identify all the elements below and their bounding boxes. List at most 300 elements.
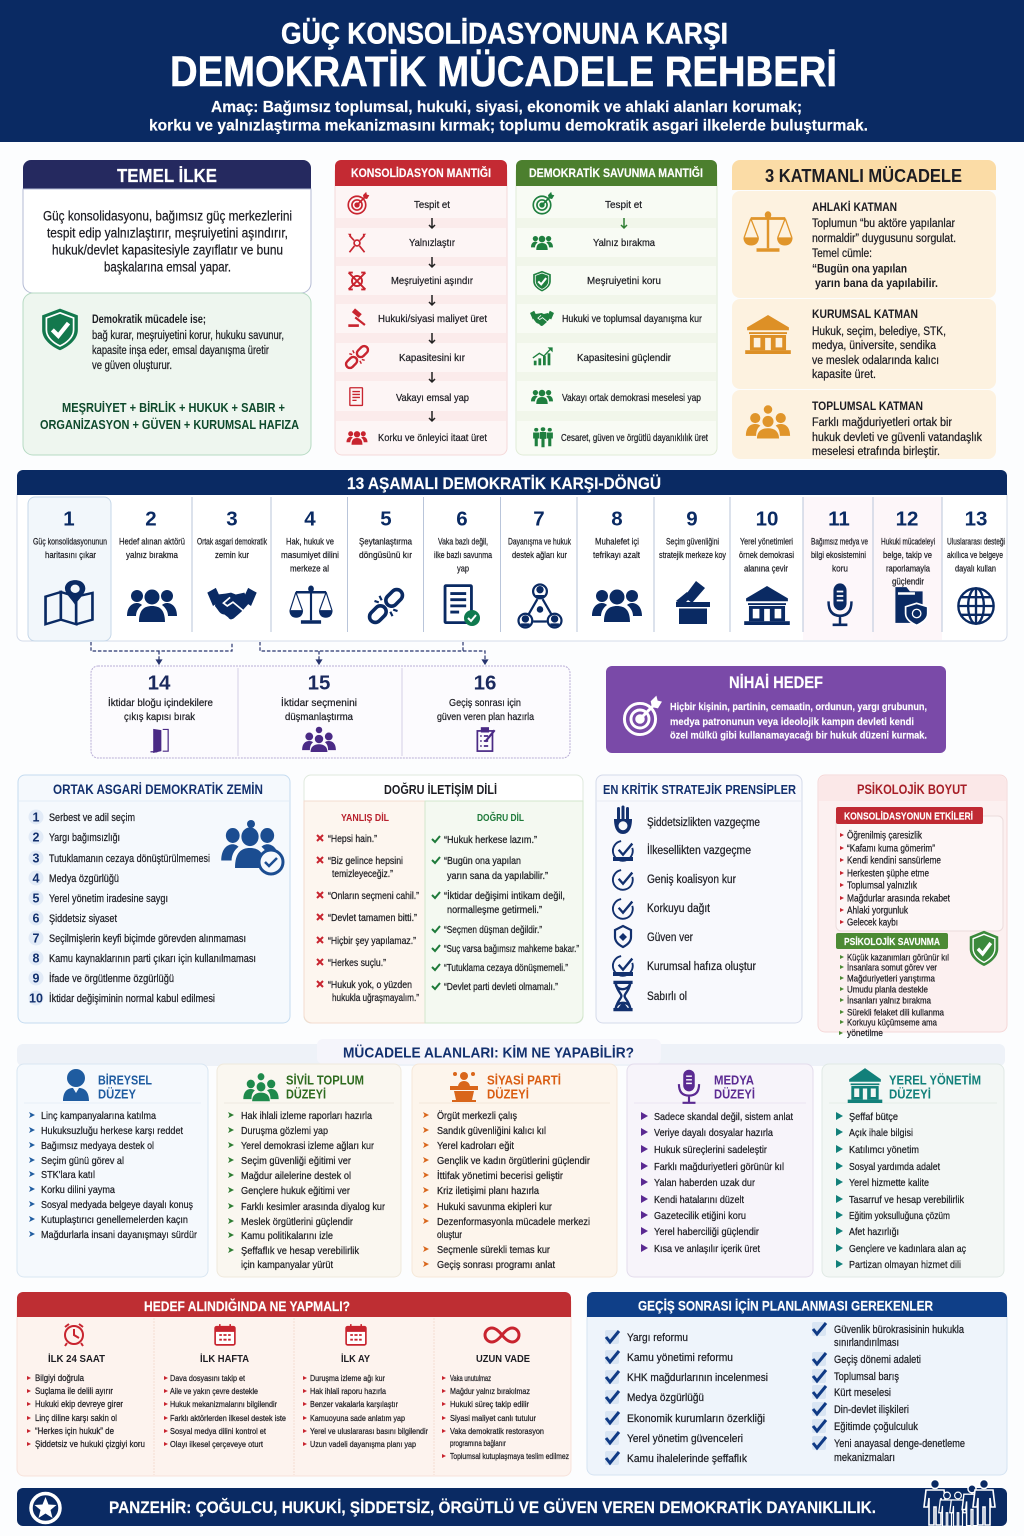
step descriptions: Güç konsolidasyonunun (33, 536, 107, 548)
bireysel heading: DÜZEY (98, 1086, 137, 1102)
panel: demokratik savunma mantığı (516, 160, 717, 455)
right language column: DOĞRU DİL (477, 811, 524, 824)
column: uzun vade: Vaka demokratik restorasyon (450, 1426, 544, 1436)
panel: siyasi parti düzeyi (412, 1064, 617, 1277)
kurumsal katman (732, 299, 996, 389)
medya list (654, 1111, 793, 1255)
step descriptions: Hedef alınan aktörü (119, 536, 185, 548)
right language column: “Suç varsa bağımsız mahkeme bakar.” (444, 944, 579, 955)
medya list: Kısa ve anlaşılır içerik üret (654, 1243, 760, 1255)
yerel list: Yerel hizmette kalite (849, 1177, 929, 1189)
konsolidasyon arrows (429, 218, 435, 421)
stage 15: 15 (308, 672, 330, 694)
step descriptions: örnek demokrasi (739, 550, 794, 561)
savunma steps: Kapasitesini güçlendir (577, 352, 671, 364)
mücadele text: bağ kurar, meşruiyetini korur, hukuku savunur, (92, 330, 284, 342)
panel: demokratik mücadele (23, 293, 311, 455)
medya list: Gazetecilik etiğini koru (654, 1210, 746, 1222)
step descriptions: Hak, hukuk ve (286, 536, 334, 548)
konsolidasyon steps: Yalnızlaştır (409, 237, 455, 249)
panel: ortak asgari demokratik zemin: 10 (29, 992, 43, 1006)
step numbers: 12 (896, 508, 918, 530)
savunma icons (530, 194, 554, 447)
column: ilk ay: Duruşma izleme ağı kur (310, 1373, 385, 1383)
right language column: normalleşme getirmeli.” (447, 905, 542, 916)
column: uzun vade: Toplumsal kutuplaşmaya teslim edilmez (450, 1451, 569, 1461)
wrong language column: temizleyeceğiz.” (332, 869, 393, 880)
panzehir text: PANZEHİR: ÇOĞULCU, HUKUKİ, ŞİDDETSİZ, ÖRGÜTLÜ VE GÜVEN VEREN DEMOKRATİK DAYANIKLILIK. (109, 1498, 876, 1517)
savunma steps: Cesaret, güven ve örgütlü dayanıklılık üret (561, 432, 708, 444)
medya list: Sadece skandal değil, sistem anlat (654, 1111, 793, 1123)
panel: ortak asgari demokratik zemin: 6 (33, 912, 40, 926)
mücadele heading: MÜCADELE ALANLARI: KİM NE YAPABİLİR? (343, 1044, 634, 1062)
right language column: “Devlet parti devleti olmamalı.” (444, 982, 558, 993)
geçiş list: Geçiş dönemi adaleti (834, 1354, 921, 1366)
column: ilk 24 saat: Suçlama ile delili ayırır (35, 1386, 113, 1396)
ahlaki katman: normaldir” duygusunu sorgulat. (812, 233, 956, 245)
zemin list: Tutuklamanın cezaya dönüştürülmemesi (49, 853, 210, 865)
column: ilk ay: Kamuoyuna sade anlatım yap (310, 1413, 405, 1423)
bireysel heading (98, 1072, 152, 1102)
sivil list: Yerel demokrasi izleme ağları kur (241, 1140, 374, 1152)
sivil list: Mağdur ailelerine destek ol (241, 1170, 351, 1182)
step descriptions: bilgi ekosistemini (811, 550, 866, 561)
wrong language column: hukukla uğraşmayalım.” (332, 993, 419, 1004)
step numbers (63, 508, 987, 530)
savunma steps: Hukuki ve toplumsal dayanışma kur (562, 313, 702, 325)
medya heading: DÜZEYİ (714, 1086, 755, 1102)
stage 14: çıkış kapısı bırak (124, 711, 196, 723)
step descriptions: Vaka bazlı değil, (438, 536, 488, 548)
konsolidasyonun etkileri: Mağdurlar arasında rekabet (847, 894, 950, 904)
medya heading: MEDYA (714, 1074, 754, 1088)
konsolidasyonun etkileri: Toplumsal yalnızlık (847, 880, 918, 892)
konsolidasyon steps: Kapasitesini kır (399, 352, 465, 364)
mücadele text: ve güven oluşturur. (92, 360, 172, 372)
kurumsal katman: kapasite üret. (812, 369, 876, 381)
panel: yerel yönetim düzeyi (822, 1064, 1004, 1277)
panel: ortak asgari demokratik zemin: 5 (33, 892, 40, 906)
column: ilk hafta: Dava dosyasını takip et (170, 1373, 246, 1383)
bireysel heading: BİREYSEL (98, 1072, 152, 1088)
panel: 13 aşamalı karşı-döngü (17, 470, 1007, 641)
nihai hedef text: özel mülkü gibi kullanamayacağı bir hukuk düzeni kurmak. (670, 730, 927, 742)
zemin list: Serbest ve adil seçim (49, 812, 135, 824)
prensipler heading: EN KRİTİK STRATEJİK PRENSİPLER (603, 782, 797, 797)
savunma steps: Vakayı ortak demokrasi meselesi yap (562, 392, 701, 404)
icon: green group (243, 1073, 279, 1101)
step descriptions: Muhalefet içi (595, 536, 639, 548)
nihai hedef text: medya patronunun veya ideolojik kampın devleti kendi (670, 716, 914, 728)
temel ilke text (43, 208, 292, 274)
toplumsal katman: TOPLUMSAL KATMAN (812, 401, 923, 413)
step icons (46, 580, 994, 628)
stage 16: Geçiş sonrası için (449, 697, 521, 709)
sivil heading: SİVİL TOPLUM (286, 1072, 364, 1088)
geçiş list: Kürt meselesi (834, 1387, 891, 1399)
prensipler list: Güven ver (647, 932, 693, 944)
siyasi list: Gençlik ve kadın örgütlerini güçlendir (437, 1155, 590, 1167)
geçiş list: Yargı reformu (627, 1332, 688, 1344)
konsolidasyonun etkileri: Öğrenilmiş çaresizlik (847, 830, 923, 842)
step descriptions: alanına çevir (744, 564, 788, 574)
column: ilk hafta: İLK HAFTA (200, 1352, 249, 1365)
dashed connectors (91, 642, 488, 664)
step numbers: 11 (828, 508, 850, 530)
column: ilk ay: Benzer vakalarla karşılaştır (310, 1399, 398, 1409)
stage 16: güven veren plan hazırla (437, 711, 534, 723)
yerel list: Sosyal yardımda adalet (849, 1161, 940, 1173)
step descriptions: Bağımsız medya ve (811, 536, 868, 548)
formula: MEŞRUİYET + BİRLİK + HUKUK + SABIR + (62, 400, 285, 415)
prensipler list: Sabırlı ol (647, 991, 687, 1003)
ahlaki katman: Toplumun “bu aktöre yapılanlar (812, 218, 955, 230)
kurumsal katman: KURUMSAL KATMAN (812, 309, 918, 321)
panel: medya düzeyi (627, 1064, 813, 1277)
psikolojik savunma: Sürekli felaket dili kullanma (847, 1008, 945, 1018)
siyasi list: Geçiş sonrası programı anlat (437, 1259, 555, 1271)
right language column (425, 801, 583, 1023)
temel ilke text: başkalarına emsal yapar. (104, 260, 231, 274)
geçiş list: Kamu yönetimi reformu (627, 1352, 733, 1364)
geçiş list: Kamu ihalelerinde şeffaflık (627, 1453, 747, 1465)
stage 14: 14 (148, 672, 171, 694)
mücadele text (92, 314, 284, 372)
siyasi list: Hukuki savunma ekipleri kur (437, 1201, 552, 1213)
panel: ortak asgari demokratik zemin: 2 (33, 830, 40, 844)
zemin list: Yargı bağımsızlığı (49, 832, 120, 844)
panel: ortak asgari demokratik zemin: 9 (33, 972, 40, 986)
column: ilk 24 saat: Linç diline karşı sakin ol (35, 1413, 117, 1423)
geçiş list: Ekonomik kurumların özerkliği (627, 1413, 765, 1425)
yerel heading: DÜZEYİ (889, 1086, 931, 1102)
icon: crowd silhouettes (924, 1480, 995, 1526)
temel ilke text: tespit edip yalnızlaştırır, meşruiyetini aşındırır, (47, 226, 288, 240)
step descriptions: masumiyet dilini (281, 550, 339, 561)
sivil heading: DÜZEYİ (286, 1086, 326, 1102)
medya list: Hukuk süreçlerini sadeleştir (654, 1144, 767, 1156)
geçiş list: Yerel yönetim güvenceleri (627, 1433, 743, 1445)
bireysel list: Linç kampanyalarına katılma (41, 1110, 156, 1122)
psikolojik savunma: yönetilme (847, 1028, 883, 1039)
savunma steps: Meşruiyetini koru (587, 275, 661, 287)
step numbers: 3 (226, 508, 238, 530)
mücadele text: kapasite inşa eder, emsal dayanışma üretir (92, 345, 269, 357)
panel: ortak asgari demokratik zemin: 3 (33, 852, 40, 866)
column: ilk hafta: Hukuk mekanizmalarını bilgilendir (170, 1399, 277, 1409)
geçiş list: Medya özgürlüğü (627, 1392, 704, 1404)
step descriptions: Şeytanlaştırma (359, 536, 413, 548)
column: ilk hafta: Sosyal medya dilini kontrol et (170, 1426, 267, 1436)
iletişim heading: DOĞRU İLETİŞİM DİLİ (384, 782, 497, 797)
geçiş list: mekanizmaları (834, 1452, 895, 1464)
konsolidasyon steps (378, 199, 487, 444)
panel: 3 katmanlı mücadele (732, 160, 996, 459)
subtitle: Amaç: Bağımsız toplumsal, hukuki, siyasi, ekonomik ve ahlaki alanları korumak; (211, 99, 802, 116)
medya heading (714, 1074, 755, 1102)
step descriptions: Yerel yönetimleri (740, 536, 793, 548)
panel: temel ilke (23, 160, 311, 293)
bireysel list: Hukuksuzluğu herkese karşı reddet (41, 1125, 183, 1137)
column: ilk ay: Uzun vadeli dayanışma planı yap (310, 1439, 416, 1449)
prensipler list: Geniş koalisyon kur (647, 874, 736, 886)
step numbers: 6 (456, 508, 468, 530)
geçiş list: Toplumsal barış (834, 1371, 899, 1383)
band: mücadele alanları (17, 1039, 1005, 1066)
step descriptions: tefrikayı azalt (593, 550, 640, 561)
konsolidasyonun etkileri: Ahlaki yorgunluk (847, 906, 909, 916)
geçiş list: Eğitimde çoğulculuk (834, 1421, 918, 1433)
psikolojik savunma: Umudu planla destekle (847, 984, 928, 996)
column: ilk ay (303, 1324, 428, 1449)
geçiş heading: GEÇİŞ SONRASI İÇİN PLANLANMASI GEREKENLER (638, 1298, 933, 1314)
column: uzun vade: Vaka unutulmaz (450, 1373, 491, 1383)
column: ilk hafta: Olayı ilkesel çerçeveye oturt (170, 1439, 264, 1449)
sivil list: Farklı kesimler arasında diyalog kur (241, 1201, 385, 1213)
wrong language column: “Devlet tamamen bitti.” (328, 913, 417, 924)
bireysel list (41, 1110, 197, 1241)
step descriptions: zemin kur (215, 550, 249, 561)
geçiş list: Din-devlet ilişkileri (834, 1404, 909, 1416)
wrong language column (304, 801, 425, 1023)
column: ilk hafta: Farklı aktörlerden ilkesel destek iste (170, 1413, 286, 1423)
yerel list: Afet hazırlığı (849, 1226, 899, 1238)
konsolidasyon steps: Korku ve önleyici itaat üret (378, 432, 487, 444)
step descriptions: ilke bazlı savunma (434, 550, 493, 561)
sivil list: için kampanyalar yürüt (241, 1259, 333, 1271)
bireysel list: Sosyal medyada belgeye dayalı konuş (41, 1199, 193, 1211)
geçiş list: Güvenlik bürokrasisinin hukukla (834, 1324, 965, 1336)
right language column: “Tutuklama cezaya dönüşmemeli.” (444, 963, 568, 974)
right language column: yarın sana da yapılabilir.” (447, 871, 548, 882)
konsolidasyon steps: Tespit et (414, 199, 450, 211)
icon: target (624, 698, 660, 735)
panel: nihai hedef (606, 666, 946, 753)
psikolojik savunma: Mağduriyetleri yarıştırma (847, 974, 936, 984)
konsolidasyonun etkileri: Herkesten şüphe etme (847, 868, 929, 880)
ahlaki katman: yarın bana da yapılabilir. (815, 278, 938, 290)
column: ilk 24 saat: “Herkes için hukuk” de (35, 1426, 114, 1436)
temel ilke text: Güç konsolidasyonu, bağımsız güç merkezlerini (43, 208, 292, 224)
wrong language column: “Hepsi hain.” (328, 834, 377, 845)
formula (40, 400, 299, 432)
siyasi list: Yerel kadroları eğit (437, 1140, 514, 1152)
step numbers: 10 (756, 508, 778, 530)
step descriptions: güçlendir (892, 576, 924, 588)
column: ilk hafta (164, 1324, 286, 1449)
temel ilke heading: TEMEL İLKE (117, 166, 217, 186)
column: uzun vade: UZUN VADE (476, 1353, 530, 1365)
toplumsal katman: hukuk devleti ve güvenli vatandaşlık (812, 432, 982, 444)
konsolidasyon steps: Meşruiyetini aşındır (391, 275, 473, 287)
konsolidasyon steps: Vakayı emsal yap (396, 392, 469, 404)
ahlaki katman: “Bugün ona yapılan (812, 264, 907, 276)
panel: doğru iletişim dili (304, 775, 583, 1023)
yerel list (849, 1111, 966, 1271)
siyasi heading: SİYASİ PARTİ (487, 1072, 561, 1088)
icon: person (63, 1069, 89, 1101)
step numbers: 2 (145, 508, 157, 530)
column: ilk ay: Hak ihlali raporu hazırla (310, 1386, 386, 1396)
savunma arrow (621, 218, 627, 228)
konsolidasyon steps: Hukuki/siyasi maliyet üret (378, 313, 487, 325)
right language column: “Bugün ona yapılan (444, 856, 521, 867)
medya list: Veriye dayalı dosyalar hazırla (654, 1127, 773, 1139)
ahlaki katman: Temel cümle: (812, 248, 872, 260)
savunma steps: Tespit et (605, 199, 642, 211)
panel: ortak asgari demokratik zemin: 7 (33, 932, 40, 946)
psikolojik savunma: Küçük kazanımları görünür kıl (847, 952, 949, 964)
döngü heading: 13 AŞAMALI DEMOKRATİK KARŞI-DÖNGÜ (347, 474, 661, 493)
bireysel list: Bağımsız medyaya destek ol (41, 1140, 154, 1152)
prensipler list: Şiddetsizlikten vazgeçme (647, 817, 760, 829)
stage 15 (281, 672, 357, 752)
nihai hedef text (670, 701, 927, 742)
nihai hedef text: Hiçbir kişinin, partinin, cemaatin, ordunun, yargı grubunun, (670, 701, 927, 713)
step descriptions: Hukuki mücadeleyi (881, 536, 935, 548)
yerel list: Katılımcı yönetim (849, 1144, 919, 1156)
icon: city hall (848, 1068, 882, 1103)
tinted cards (28, 497, 111, 641)
siyasi list: Sandık güvenliğini kalıcı kıl (437, 1125, 546, 1137)
panel: konsolidasyon mantığı (335, 160, 507, 455)
yerel heading: YEREL YÖNETİM (889, 1072, 981, 1088)
zemin list: Şiddetsiz siyaset (49, 913, 117, 925)
yerel heading (889, 1072, 981, 1102)
bireysel list: Mağdurlarla insani dayanışmayı sürdür (41, 1229, 197, 1241)
bireysel list: Seçim günü görev al (41, 1155, 124, 1167)
step numbers: 1 (63, 508, 75, 530)
stage 15: düşmanlaştırma (285, 711, 353, 723)
siyasi heading (487, 1072, 561, 1102)
stage 16 (437, 672, 534, 751)
konsolidasyonun etkileri: Kendi kendini sansürleme (847, 856, 941, 866)
nihai hedef heading: NİHAİ HEDEF (729, 674, 823, 692)
yerel list: Partizan olmayan hizmet dili (849, 1259, 961, 1271)
sivil list: Gençlere hukuk eğitimi ver (241, 1185, 350, 1197)
mücadele text: Demokratik mücadele ise; (92, 314, 206, 326)
kurumsal katman: Hukuk, seçim, belediye, STK, (812, 326, 946, 338)
step descriptions: Dayanışma ve hukuk (508, 536, 571, 548)
column: uzun vade: Mağdur yalnız bırakılmaz (450, 1386, 530, 1396)
step descriptions: döngüsünü kır (359, 550, 412, 561)
step descriptions: Seçim güvenliğini (666, 536, 719, 548)
step descriptions: haritasını çıkar (45, 550, 96, 561)
icon: podium (450, 1072, 478, 1102)
medya list: Yalan haberden uzak dur (654, 1177, 755, 1189)
yerel list: Gençlere ve kadınlara alan aç (849, 1243, 966, 1255)
panel: ortak asgari demokratik zemin: 8 (33, 952, 40, 966)
toplumsal katman (732, 390, 996, 459)
step numbers: 8 (611, 508, 623, 530)
right language column: “Hukuk herkese lazım.” (444, 835, 537, 846)
siyasi heading: DÜZEYİ (487, 1086, 529, 1102)
sivil list: Şeffaflık ve hesap verebilirlik (241, 1245, 360, 1257)
bireysel list: Kutuplaştırıcı genellemelerden kaçın (41, 1214, 188, 1226)
sivil list: Duruşma gözlemi yap (241, 1125, 328, 1137)
column: ilk 24 saat: Şiddetsiz ve hukuki çizgiyi koru (35, 1439, 145, 1449)
panel: psikolojik boyut (818, 775, 1007, 1039)
konsolidasyonun etkileri: KONSOLİDASYONUN ETKİLERİ (844, 810, 973, 822)
siyasi list: Kriz iletişimi planı hazırla (437, 1185, 539, 1197)
stage 16: 16 (474, 672, 496, 694)
medya list: Farklı mağduriyetleri görünür kıl (654, 1161, 784, 1173)
band: panzehir (17, 1480, 1007, 1526)
zemin list (49, 812, 256, 1005)
subtitle (149, 99, 868, 134)
prensipler icons (613, 806, 633, 1010)
medya list: Yerel haberciliği güçlendir (654, 1226, 759, 1238)
step descriptions: destek ağları kur (512, 550, 567, 561)
number badges (28, 810, 44, 1006)
column: ilk 24 saat (27, 1324, 145, 1449)
zemin list: Yerel yönetim iradesine saygı (49, 893, 168, 905)
geçiş list: sınırlandırılması (834, 1337, 899, 1349)
wrong language column: “Hiçbir şey yapılamaz.” (328, 936, 416, 947)
zemin list: Kamu kaynaklarının parti çıkarı için kullanılmaması (49, 953, 256, 965)
sivil list: Seçim güvenliği eğitimi ver (241, 1155, 351, 1167)
column: uzun vade (442, 1328, 569, 1461)
wrong language column: “Biz gelince hepsini (328, 856, 403, 867)
sivil list (241, 1110, 385, 1271)
psikolojik savunma: Korkuyu küçümseme ama (847, 1018, 938, 1028)
stage 15: İktidar seçmenini (281, 696, 357, 709)
step descriptions: yap (457, 564, 469, 574)
prensipler list (647, 817, 760, 1003)
zemin list: Seçilmişlerin keyfi biçimde görevden alınmaması (49, 933, 246, 945)
header band (0, 0, 1024, 142)
formula: ORGANİZASYON + GÜVEN + KURUMSAL HAFIZA (40, 417, 299, 432)
toplumsal katman: meselesi etrafında birleştir. (812, 446, 940, 458)
column: ilk 24 saat: Hukuki ekip devreye girer (35, 1399, 123, 1409)
wrong language column: “Onların seçmeni cahil.” (328, 891, 419, 902)
panel: ortak asgari demokratik zemin: 1 (33, 810, 40, 824)
yerel list: Eğitim yoksulluğuna çözüm (849, 1210, 950, 1222)
step descriptions: dayalı kullan (955, 564, 996, 574)
step descriptions: yalnız bırakma (126, 550, 179, 561)
wrong language column: “Hukuk yok, o yüzden (328, 980, 412, 991)
wrong language column: “Herkes suçlu.” (328, 958, 386, 969)
prensipler list: İlkesellikten vazgeçme (647, 844, 751, 857)
step descriptions: Ortak asgari demokratik (197, 536, 267, 548)
siyasi list: Seçmenle sürekli temas kur (437, 1244, 550, 1256)
sivil list: Meslek örgütlerini güçlendir (241, 1216, 353, 1228)
panel: en kritik stratejik prensipler (596, 775, 802, 1023)
column: uzun vade: Siyasi maliyet canlı tutulur (450, 1413, 536, 1423)
prensipler list: Kurumsal hafıza oluştur (647, 961, 756, 973)
icon: star badge (31, 1494, 60, 1522)
zemin list: İfade ve örgütlenme özgürlüğü (49, 972, 174, 985)
psikolojik savunma: İnsanlara somut görev ver (847, 962, 937, 974)
hedef heading: HEDEF ALINDIĞINDA NE YAPMALI? (144, 1299, 350, 1314)
bireysel list: STK'lara katıl (41, 1169, 95, 1181)
medya list: Kendi hatalarını düzelt (654, 1194, 744, 1206)
geçiş list: KHK mağdurlarının incelenmesi (627, 1372, 768, 1384)
stage 14: İktidar bloğu içindekilere (108, 696, 213, 709)
icon: green shield (42, 309, 78, 350)
panel: ortak asgari demokratik zemin: 4 (33, 872, 40, 886)
psikolojik savunma: İnsanları yalnız bırakma (847, 996, 932, 1006)
step numbers: 7 (533, 508, 545, 530)
psikolojik savunma (836, 931, 998, 1039)
step descriptions: akıllıca ve belgeye (947, 550, 1003, 561)
konsolidasyonun etkileri (836, 807, 1003, 931)
column: uzun vade: Hukuki süreç takip edilir (450, 1399, 529, 1409)
panel: bireysel düzey (17, 1064, 208, 1277)
step descriptions: stratejik merkeze koy (659, 550, 726, 561)
zemin list: Medya özgürlüğü (49, 873, 119, 885)
siyasi list (437, 1110, 590, 1271)
